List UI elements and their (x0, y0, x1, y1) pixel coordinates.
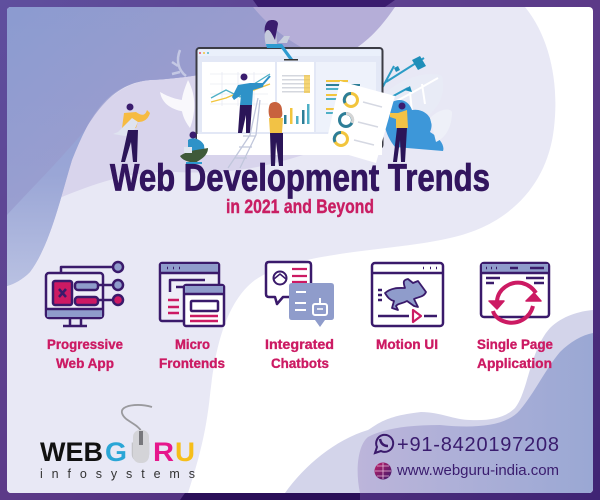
logo: R (153, 437, 174, 467)
label: motion ui: Motion UI (376, 336, 438, 352)
icon: globe (374, 462, 392, 480)
icon: progressive web app (46, 262, 123, 326)
label: progressive web app: Web App (56, 355, 114, 371)
label: integrated chatbots (265, 336, 334, 371)
illustration: dashboard scene (113, 20, 452, 168)
leaves right (380, 56, 452, 151)
logo: U (175, 437, 195, 467)
logo (40, 405, 195, 481)
label: single page application (477, 336, 553, 371)
website: www.webguru-india.com (396, 462, 559, 479)
logo: U (130, 437, 151, 467)
icon: integrated chatbots (266, 262, 334, 327)
icon: mouse (122, 405, 152, 463)
logo: infosystems (40, 467, 195, 481)
logo: G (105, 437, 127, 467)
person: sitting man (180, 132, 208, 164)
icon: whatsapp (375, 435, 393, 453)
logo: WEB (40, 437, 103, 467)
person: woman in front (269, 102, 283, 166)
label: single page application: Single Page (477, 336, 553, 352)
plant left (160, 80, 194, 128)
label: integrated chatbots: Integrated (265, 336, 334, 352)
person: woman on top (265, 20, 298, 60)
label: integrated chatbots: Chatbots (271, 355, 329, 371)
icon: motion ui (372, 263, 443, 326)
line chart (210, 72, 270, 106)
dot matrix (282, 75, 310, 93)
icon: single page application (481, 263, 549, 323)
monitor (196, 48, 382, 155)
label: progressive web app (47, 336, 123, 371)
person: left man (113, 104, 150, 162)
person: right man (390, 102, 408, 162)
paper with donuts (325, 81, 395, 163)
label: micro frontends: Micro (175, 336, 210, 352)
horizontal bars (326, 80, 360, 114)
icon: micro frontends (160, 263, 224, 326)
title: Web Development Trends (110, 158, 490, 200)
label: single page application: Application (477, 355, 552, 371)
subtitle: in 2021 and Beyond (226, 196, 374, 218)
label: micro frontends: Frontends (159, 355, 225, 371)
label: micro frontends (159, 336, 225, 371)
phone number: +91-8420197208 (397, 434, 559, 456)
bar chart (284, 104, 310, 124)
ladder (228, 98, 260, 168)
label: progressive web app: Progressive (47, 336, 123, 352)
person: man at board (232, 74, 270, 133)
